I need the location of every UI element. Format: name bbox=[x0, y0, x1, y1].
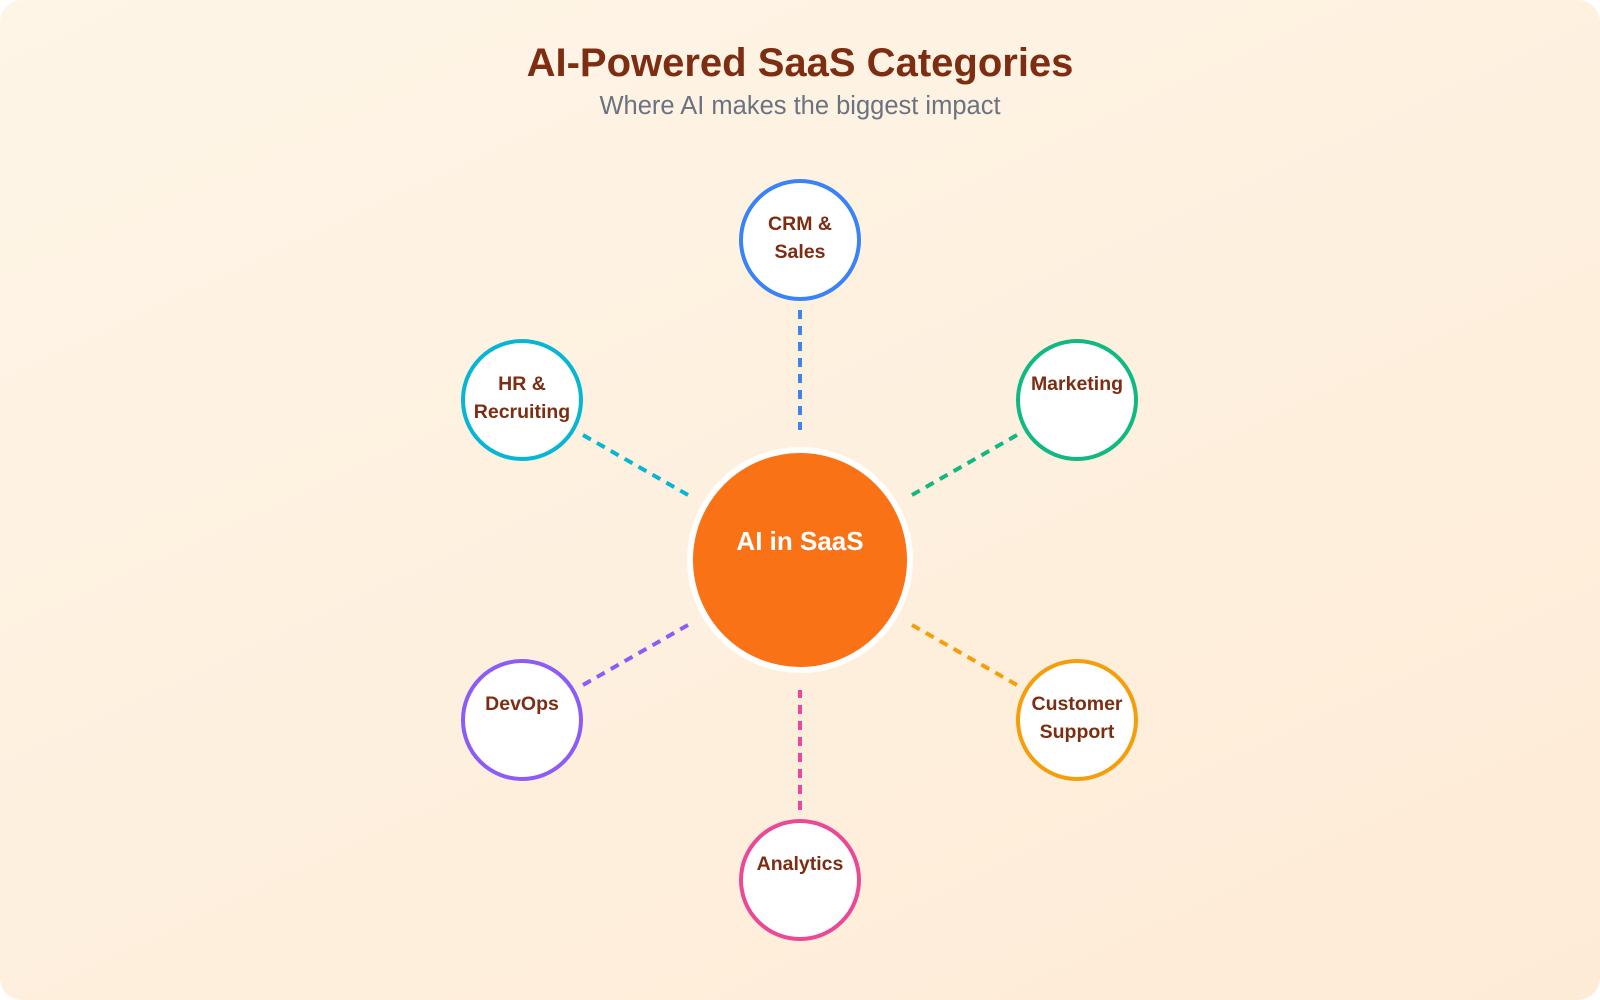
node: Customer Support: Customer bbox=[1031, 693, 1123, 715]
node: HR & Recruiting: HR & bbox=[498, 373, 546, 395]
node: Customer Support bbox=[1018, 661, 1136, 779]
node: CRM & Sales bbox=[741, 181, 859, 299]
node: CRM & Sales: Sales bbox=[775, 241, 826, 263]
node: Customer Support: Support bbox=[1040, 721, 1115, 743]
node: HR & Recruiting: Recruiting bbox=[474, 401, 570, 423]
node: Marketing bbox=[1018, 341, 1136, 459]
node: Analytics: Analytics bbox=[757, 853, 844, 875]
node: DevOps bbox=[463, 661, 581, 779]
node: Analytics bbox=[741, 821, 859, 939]
node: CRM & Sales: CRM & bbox=[768, 213, 832, 235]
center hub: AI in SaaS bbox=[736, 526, 864, 556]
node: DevOps: DevOps bbox=[485, 693, 559, 715]
center hub bbox=[690, 450, 910, 670]
subtitle: Where AI makes the biggest impact bbox=[599, 92, 1001, 120]
node: HR & Recruiting bbox=[463, 341, 581, 459]
title: AI-Powered SaaS Categories bbox=[527, 41, 1073, 85]
node: Marketing: Marketing bbox=[1031, 373, 1123, 395]
connector lines bbox=[583, 310, 1017, 810]
